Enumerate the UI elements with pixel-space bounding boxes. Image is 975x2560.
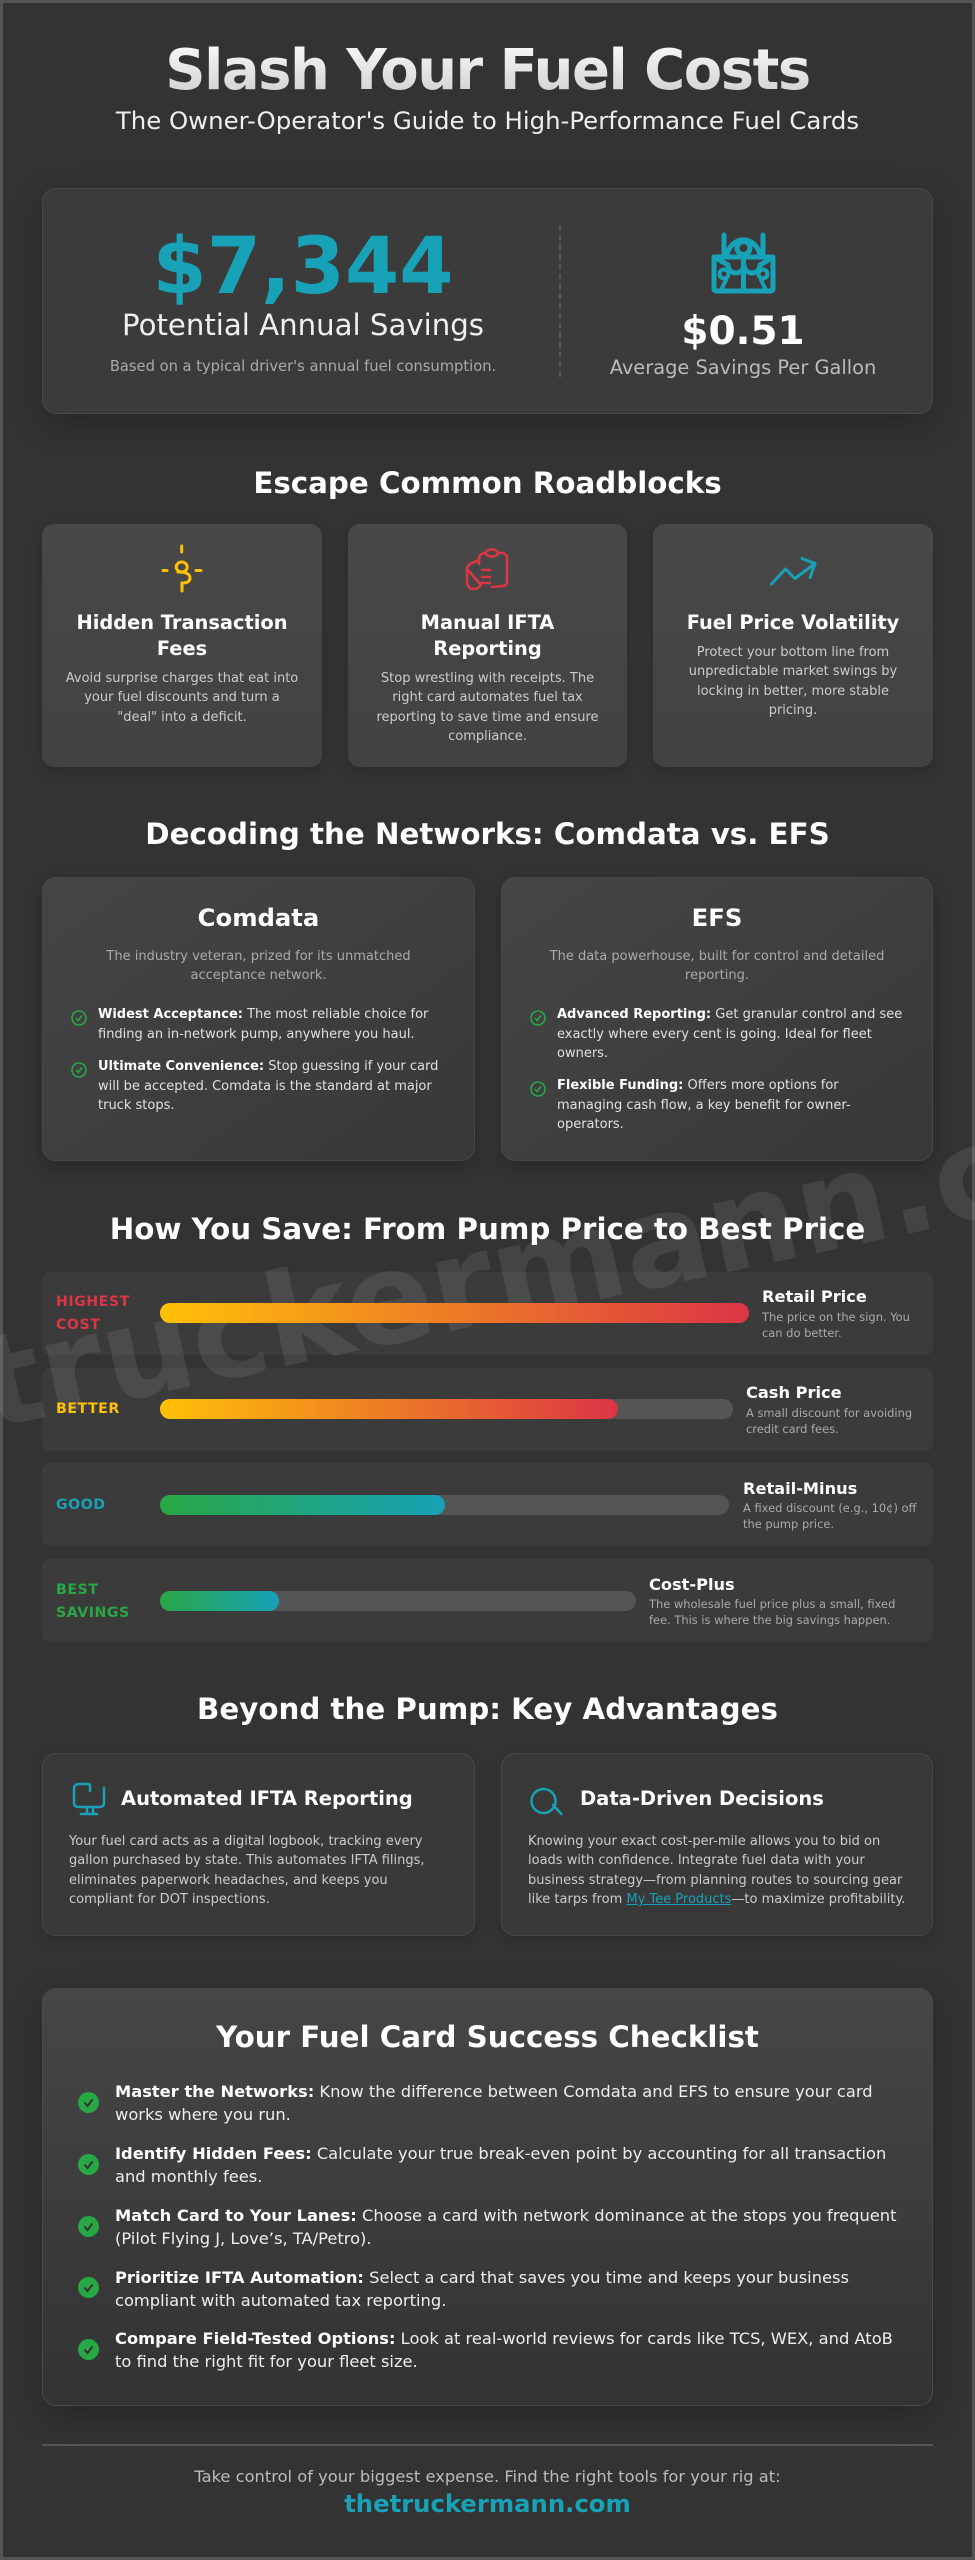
advantage description: business strategy—from planning routes to sourcing gear — [528, 1873, 902, 1888]
tier description: A small discount for avoiding — [746, 1406, 912, 1420]
icon: check — [71, 1010, 87, 1026]
panel: cash price row — [42, 1368, 933, 1451]
card description — [689, 645, 897, 718]
network description: acceptance network. — [190, 968, 327, 983]
advantage description: eliminates paperwork headaches, and keeps you — [69, 1873, 388, 1888]
advantage description: loads with confidence. Integrate fuel data with your — [528, 1853, 865, 1868]
tier description: The wholesale fuel price plus a small, fixed — [649, 1597, 895, 1611]
checklist item 5: to find the right fit for your fleet size. — [115, 2352, 418, 2371]
card title: Fuel Price Volatility — [687, 611, 899, 634]
advantage title: Automated IFTA Reporting — [121, 1787, 413, 1810]
checklist icon 1 — [78, 2092, 99, 2113]
checklist item 5: Compare Field-Tested Options: Look at real-world reviews for cards like TCS, WEX, and AtoB — [115, 2329, 893, 2348]
tier description — [746, 1406, 912, 1436]
checklist item 4: Prioritize IFTA Automation: Select a card that saves you time and keeps your business — [115, 2268, 849, 2287]
feature: ultimate convenience: will be accepted. Comdata is the standard at major — [98, 1078, 432, 1094]
checklist item 1: Master the Networks: Know the difference between Comdata and EFS to ensure your card — [115, 2082, 873, 2101]
card title: Hidden Transaction — [76, 611, 288, 634]
network name: Comdata — [198, 903, 319, 932]
feature: ultimate convenience — [98, 1059, 438, 1113]
price bar — [160, 1591, 636, 1611]
panel: EFS — [501, 877, 933, 1161]
checklist item 3: Match Card to Your Lanes: Choose a card with network dominance at the stops you frequent — [115, 2206, 896, 2225]
tier label — [56, 1294, 130, 1332]
card description: Protect your bottom line from — [697, 645, 889, 660]
card description: pricing. — [769, 703, 817, 718]
tier description: can do better. — [762, 1326, 842, 1340]
checklist item 1: works where you run. — [115, 2105, 291, 2124]
card description: locking in better, more stable — [697, 684, 889, 699]
panel: manual IFTA — [348, 524, 627, 767]
price bar — [160, 1495, 729, 1515]
tier label: BEST — [56, 1582, 98, 1598]
panel: Comdata — [42, 877, 475, 1161]
title — [0, 35, 975, 107]
network description: The data powerhouse, built for control and detailed — [550, 949, 884, 964]
checklist item 4 — [115, 2268, 849, 2310]
panel: hidden fees — [42, 524, 322, 767]
icon: fuel pump emblem — [712, 232, 776, 294]
panel: price volatility — [653, 524, 933, 767]
tier description — [743, 1501, 917, 1531]
card description: right card automates fuel tax — [392, 690, 583, 705]
network description: The industry veteran, prized for its unmatched — [106, 949, 411, 964]
feature: widest acceptance: finding an in-network pump, anywhere you haul. — [98, 1026, 415, 1042]
panel: checklist — [42, 1988, 933, 2406]
network name: EFS — [692, 903, 742, 932]
feature: flexible funding: operators. — [557, 1117, 624, 1132]
tier label: HIGHEST — [56, 1294, 130, 1310]
network description — [106, 949, 411, 983]
advantage description — [528, 1834, 905, 1907]
tier label: SAVINGS — [56, 1604, 130, 1620]
card description — [376, 671, 599, 744]
icon: check — [71, 1062, 87, 1078]
feature: flexible funding — [557, 1078, 851, 1132]
icon: trend arrow — [770, 557, 816, 586]
advantage description: Your fuel card acts as a digital logbook, tracking every — [69, 1834, 422, 1849]
checklist icon 2 — [78, 2154, 99, 2175]
tier label: GOOD — [56, 1497, 106, 1513]
card description: "deal" into a deficit. — [117, 710, 247, 725]
feature: ultimate convenience: truck stops. — [98, 1098, 174, 1113]
feature: widest acceptance — [98, 1007, 428, 1042]
panel: automated IFTA — [42, 1753, 475, 1936]
network description: reporting. — [685, 968, 749, 983]
tier description: A fixed discount (e.g., 10¢) off — [743, 1501, 916, 1515]
checklist item 3 — [115, 2206, 896, 2248]
checklist icon 3 — [78, 2216, 99, 2237]
icon: monitor — [72, 1782, 106, 1816]
advantage description: Knowing your exact cost-per-mile allows you to bid on — [528, 1834, 880, 1849]
footer link: thetruckermann.com — [344, 2489, 631, 2518]
card title: Fees — [157, 637, 207, 660]
icon: clipboard — [466, 548, 508, 590]
annual savings note: Based on a typical driver's annual fuel consumption. — [110, 358, 496, 375]
tier name: Retail Price — [762, 1287, 867, 1306]
card title — [76, 611, 288, 660]
tier description — [649, 1597, 895, 1627]
feature: ultimate convenience: Ultimate Convenience: Stop guessing if your card — [98, 1059, 438, 1074]
card title — [421, 611, 554, 660]
advantage description: gallon purchased by state. This automates IFTA filings, — [69, 1853, 425, 1868]
network description — [550, 949, 884, 983]
checklist item 3: (Pilot Flying J, Love’s, TA/Petro). — [115, 2229, 372, 2248]
heading: networks: Decoding the Networks: Comdata vs. EFS — [145, 817, 830, 851]
checklist item 2 — [115, 2144, 886, 2186]
subtitle: The Owner-Operator's Guide to High-Performance Fuel Cards — [116, 106, 859, 135]
tier name: Retail-Minus — [743, 1479, 857, 1498]
card title: Reporting — [433, 637, 542, 660]
tier name: Cash Price — [746, 1383, 842, 1402]
heading: how you save: How You Save: From Pump Price to Best Price — [110, 1212, 865, 1246]
tier name: Cost-Plus — [649, 1575, 735, 1594]
panel: cost-plus row — [42, 1559, 933, 1642]
feature: flexible funding: managing cash flow, a key benefit for owner- — [557, 1098, 851, 1112]
card description: reporting to save time and ensure — [376, 710, 599, 725]
heading: key advantages: Beyond the Pump: Key Advantages — [197, 1692, 778, 1726]
tier description: fee. This is where the big savings happen. — [649, 1613, 890, 1627]
feature: flexible funding: Flexible Funding: Offers more options for — [557, 1078, 839, 1093]
feature: advanced reporting: exactly where every cent is going. Ideal for fleet — [557, 1026, 872, 1042]
checklist item 2: Identify Hidden Fees: Calculate your true break-even point by accounting for all transaction — [115, 2144, 886, 2163]
checklist icon 4 — [78, 2277, 99, 2298]
panel: retail-minus row — [42, 1463, 933, 1546]
tier label — [56, 1582, 130, 1620]
tier label: COST — [56, 1316, 100, 1332]
card description: Avoid surprise charges that eat into — [66, 671, 298, 686]
checklist icon 5 — [78, 2339, 99, 2360]
tier description: the pump price. — [743, 1517, 834, 1531]
icon: check — [530, 1010, 546, 1026]
icon: dollar sign — [162, 544, 202, 592]
card description: unpredictable market swings by — [689, 664, 897, 679]
checklist heading: Your Fuel Card Success Checklist — [216, 2020, 759, 2054]
per gallon label: Average Savings Per Gallon — [610, 356, 876, 379]
card description: your fuel discounts and turn a — [84, 690, 280, 705]
tier description — [762, 1310, 910, 1340]
price bar — [160, 1399, 733, 1419]
advantage description: like tarps from My Tee Products—to maximize profitability. — [528, 1892, 905, 1907]
panel: data-driven — [501, 1753, 933, 1936]
panel: hero savings — [42, 188, 933, 414]
card description: Stop wrestling with receipts. The — [381, 671, 594, 686]
card description — [66, 671, 298, 725]
feature: advanced reporting: owners. — [557, 1046, 608, 1061]
tier description: credit card fees. — [746, 1422, 839, 1436]
heading: roadblocks: Escape Common Roadblocks — [253, 466, 722, 500]
advantage description: compliant for DOT inspections. — [69, 1892, 270, 1907]
card description: compliance. — [448, 729, 527, 744]
per gallon figure: $0.51 — [681, 309, 805, 354]
price bar — [160, 1303, 749, 1323]
advantage description — [69, 1834, 425, 1907]
panel: retail price row — [42, 1272, 933, 1355]
footer text: Take control of your biggest expense. Find the right tools for your rig at: — [194, 2467, 781, 2486]
icon: check — [530, 1081, 546, 1097]
checklist item 1 — [115, 2082, 873, 2124]
title: Slash Your Fuel Costs — [165, 38, 810, 103]
checklist item 5 — [115, 2329, 893, 2371]
card title: Manual IFTA — [421, 611, 554, 634]
advantage title: Data-Driven Decisions — [580, 1787, 824, 1810]
checklist item 2: and monthly fees. — [115, 2167, 262, 2186]
tier label: BETTER — [56, 1401, 120, 1417]
annual savings figure: $7,344 — [152, 222, 454, 312]
feature: advanced reporting: Advanced Reporting: Get granular control and see — [557, 1007, 902, 1022]
feature: widest acceptance: Widest Acceptance: The most reliable choice for — [98, 1007, 428, 1022]
annual savings label: Potential Annual Savings — [122, 308, 484, 342]
divider — [559, 225, 561, 377]
checklist item 4: compliant with automated tax reporting. — [115, 2291, 446, 2310]
tier description: The price on the sign. You — [762, 1310, 910, 1324]
feature: advanced reporting — [557, 1007, 902, 1061]
icon: magnifier — [530, 1788, 563, 1816]
